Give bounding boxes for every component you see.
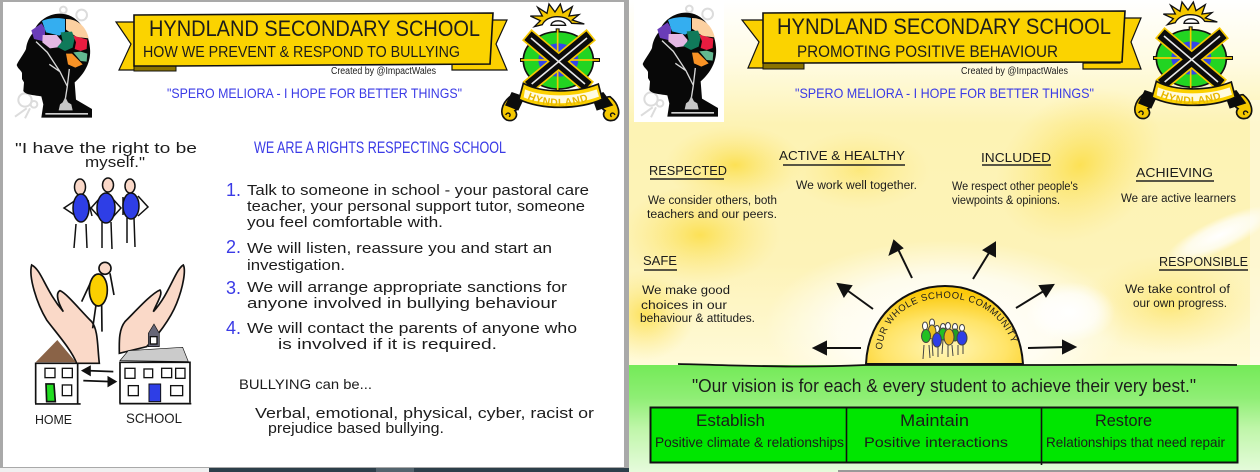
step 4: is involved if it is required. [278, 336, 497, 353]
step 3: anyone involved in bullying behaviour [247, 295, 557, 312]
bullying types: Verbal, emotional, physical, cyber, racist or [255, 405, 594, 422]
banner: bullying title [116, 13, 507, 71]
illustration: sun with school community [865, 285, 1024, 364]
value: responsible: our own progress. [1133, 298, 1227, 310]
step 3: 3. [226, 278, 241, 298]
value: safe: SAFE [643, 253, 677, 268]
step 4: 4. [226, 318, 241, 338]
icon: school [119, 324, 191, 404]
subheading: HOW WE PREVENT & RESPOND TO BULLYING [143, 44, 460, 61]
value: respected: We consider others, both [648, 195, 777, 207]
heading: HYNDLAND SECONDARY SCHOOL [777, 14, 1111, 39]
arrows: radiating from sun [814, 241, 1075, 354]
quote [15, 140, 197, 171]
value: respected: RESPECTED [649, 163, 727, 178]
value: responsible: RESPONSIBLE [1159, 254, 1248, 269]
value: achieving: ACHIEVING [1136, 165, 1213, 180]
illustration: hands, home and school [31, 262, 191, 404]
value: included [952, 150, 1078, 207]
value: respected: teachers and our peers. [647, 209, 777, 221]
icon: left hand [31, 265, 99, 363]
column: restore: Restore [1095, 411, 1152, 430]
quote: myself." [85, 154, 145, 171]
panel: positive behaviour poster [629, 0, 1260, 472]
panel: bullying poster [0, 0, 629, 472]
horizon line [678, 364, 1237, 367]
column: maintain: Maintain [900, 411, 969, 430]
column: maintain [864, 411, 1008, 450]
step 2: investigation. [247, 257, 345, 274]
step 4 [226, 318, 577, 353]
icon: home [35, 340, 81, 404]
icon: school crest: HYNDLAND [1160, 90, 1220, 104]
icon: brain head [15, 7, 92, 118]
arc label: OUR WHOLE SCHOOL COMMUNITY [876, 291, 1018, 349]
step 1: 1. [226, 180, 241, 200]
column: restore: Relationships that need repair [1046, 434, 1225, 450]
bullying types: prejudice based bullying. [268, 420, 444, 437]
icon: brain head on white card [634, 0, 724, 122]
icon: school crest [501, 2, 620, 122]
value: responsible: We take control of [1125, 284, 1231, 296]
value: safe: behaviour & attitudes. [640, 313, 755, 325]
heading: HYNDLAND SECONDARY SCHOOL [149, 16, 480, 41]
community figures [922, 319, 967, 359]
value: active and healthy: We work well together. [796, 180, 917, 192]
icon: school crest: HYNDLAND [528, 92, 588, 106]
quote: "I have the right to be [15, 140, 197, 157]
bullying types: BULLYING can be... [239, 376, 372, 392]
step 4: We will contact the parents of anyone who [247, 320, 577, 337]
bullying types [239, 376, 594, 437]
value: included: INCLUDED [981, 150, 1051, 165]
value: responsible [1125, 254, 1248, 310]
heading: rights respecting: WE ARE A RIGHTS RESPECTING SCHOOL [254, 138, 506, 157]
value: included: We respect other people's [952, 181, 1078, 193]
step 3: We will arrange appropriate sanctions for [247, 279, 567, 296]
label: home: HOME [35, 412, 72, 427]
column: maintain: Positive interactions [864, 434, 1008, 450]
value: achieving [1121, 165, 1236, 205]
illustration: three figures [64, 178, 148, 249]
icon: right hand [119, 265, 184, 353]
icon: figure held by hands [82, 262, 114, 332]
label: school: SCHOOL [126, 410, 182, 426]
step 1: Talk to someone in school - your pastoral care [247, 182, 589, 199]
vision statement: "Our vision is for each & every student to achieve their very best." [692, 376, 1196, 396]
subheading: PROMOTING POSITIVE BEHAVIOUR [797, 42, 1058, 61]
step 2: We will listen, reassure you and start an [247, 240, 552, 257]
banner: behaviour title [742, 11, 1141, 69]
arrows between home and school [83, 367, 116, 386]
column: restore [1046, 411, 1225, 450]
motto: "SPERO MELIORA - I HOPE FOR BETTER THINGS" [167, 85, 462, 101]
icon: school crest [1134, 0, 1252, 120]
value: active and healthy [779, 148, 917, 192]
column: establish: Establish [696, 411, 765, 430]
step 1: you feel comfortable with. [247, 214, 443, 231]
step 1 [226, 180, 589, 231]
motto: "SPERO MELIORA - I HOPE FOR BETTER THINGS" [795, 85, 1094, 101]
value: included: viewpoints & opinions. [952, 195, 1060, 207]
column: establish [655, 411, 844, 450]
value: active and healthy: ACTIVE & HEALTHY [779, 148, 905, 163]
value: safe [640, 253, 755, 325]
value: achieving: We are active learners [1121, 193, 1236, 205]
value: safe: choices in our [641, 300, 727, 312]
table: establish, maintain, restore [650, 407, 1238, 465]
step 2 [226, 237, 552, 274]
value: safe: We make good [642, 285, 730, 297]
step 2: 2. [226, 237, 241, 257]
step 3 [226, 278, 567, 312]
credit: Created by @ImpactWales [961, 66, 1068, 77]
column: establish: Positive climate & relationships [655, 434, 844, 450]
value: respected [647, 163, 777, 221]
credit: Created by @ImpactWales [331, 66, 436, 77]
step 1: teacher, your personal support tutor, someone [247, 198, 585, 215]
